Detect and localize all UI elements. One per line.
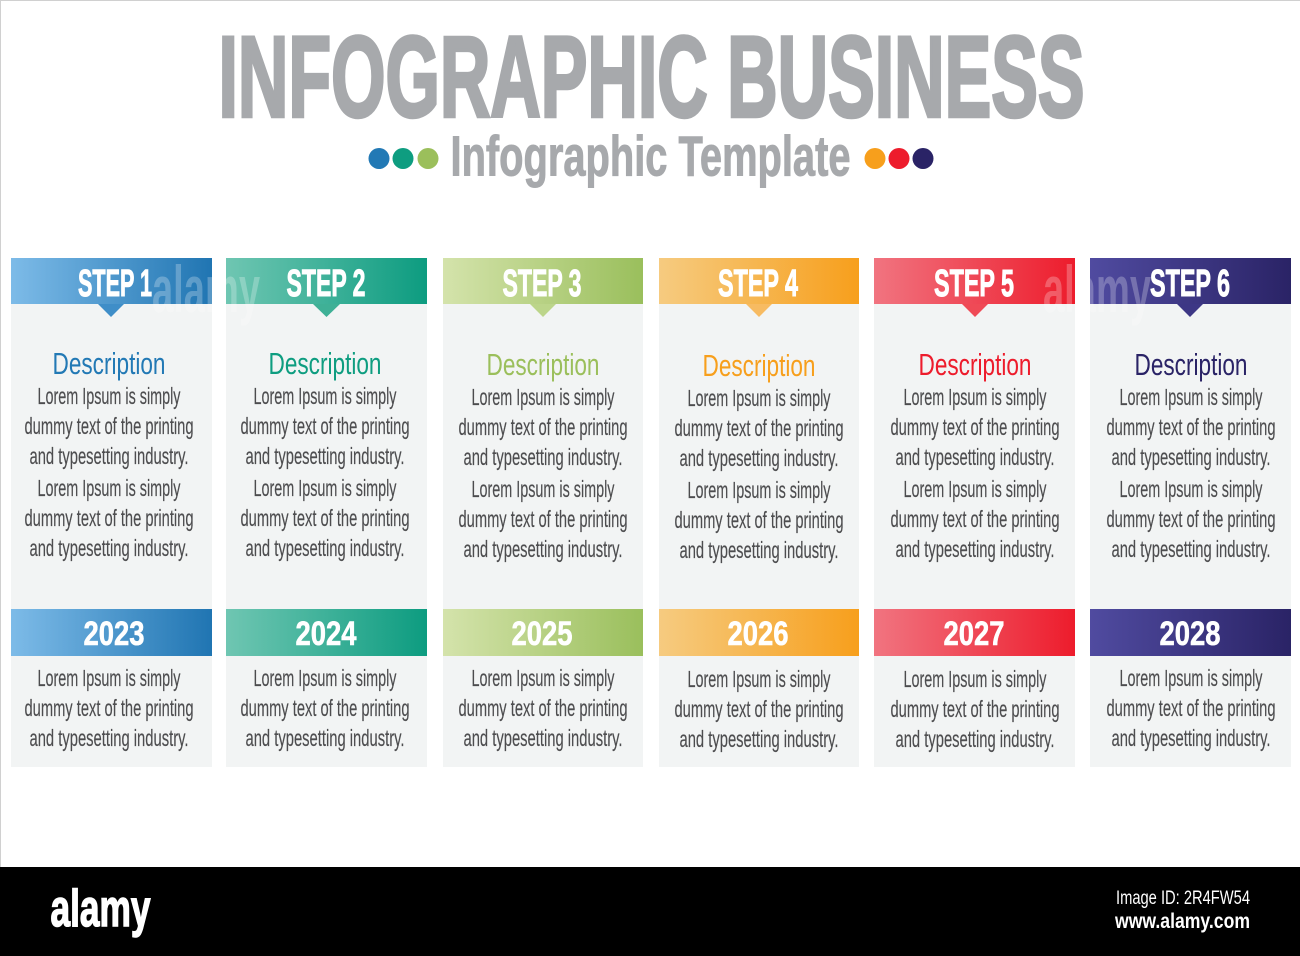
panel: step 2	[226, 258, 427, 767]
step 5 body text: dummy text of the printing	[890, 414, 1060, 440]
step 5 body text: and typesetting industry.	[896, 536, 1054, 562]
step 2 body text: Lorem Ipsum is simply	[254, 475, 397, 501]
step 1 body text: and typesetting industry.	[30, 443, 188, 469]
step 1 body text: Lorem Ipsum is simply	[38, 383, 181, 409]
step 5 body text: Lorem Ipsum is simply	[904, 384, 1047, 410]
panel: step 1	[11, 258, 212, 767]
year 2026	[659, 609, 859, 656]
step 4 body text: and typesetting industry.	[680, 445, 838, 471]
step 4 body text: Lorem Ipsum is simply	[688, 385, 831, 411]
step 3 body text: Lorem Ipsum is simply	[472, 384, 615, 410]
year 2025 text: dummy text of the printing	[458, 695, 628, 721]
year 2026 text: Lorem Ipsum is simply	[688, 666, 831, 692]
step 3 header: STEP 3	[502, 263, 582, 305]
year 2028	[1090, 609, 1291, 656]
year 2025: 2025	[512, 615, 572, 653]
year 2027 text: Lorem Ipsum is simply	[904, 666, 1047, 692]
year 2024 text: dummy text of the printing	[240, 695, 410, 721]
step 4 body text: and typesetting industry.	[680, 537, 838, 563]
icon: right coloured dots	[864, 148, 934, 169]
year 2025	[443, 609, 643, 656]
step 4 header: STEP 4	[718, 263, 798, 305]
year 2024 text: and typesetting industry.	[246, 725, 404, 751]
step 2 header	[226, 258, 427, 317]
year 2027	[874, 609, 1075, 656]
step 6 description: Description	[1134, 347, 1248, 382]
icon: left coloured dots	[368, 148, 438, 169]
year 2023	[11, 609, 212, 656]
step 1 description: Description	[52, 346, 166, 381]
website: www.alamy.com	[1114, 910, 1250, 933]
step 3 body text: and typesetting industry.	[464, 536, 622, 562]
step 1 body text: dummy text of the printing	[24, 505, 194, 531]
year 2025 text: and typesetting industry.	[464, 725, 622, 751]
step 4 body text	[674, 385, 844, 563]
panel: step 3	[443, 258, 643, 767]
step 2 description: Description	[268, 346, 382, 381]
step 4 body text: Lorem Ipsum is simply	[688, 477, 831, 503]
step 3 body text: and typesetting industry.	[464, 444, 622, 470]
year 2023 text: and typesetting industry.	[30, 725, 188, 751]
footer bar	[0, 867, 1300, 956]
panel: step 5	[874, 258, 1075, 767]
step 3 body text: dummy text of the printing	[458, 506, 628, 532]
year 2028 text	[1106, 665, 1276, 751]
watermarks: alamy	[152, 252, 260, 326]
step 4 header	[659, 258, 859, 317]
step 2 body text: dummy text of the printing	[240, 505, 410, 531]
step 3 body text	[458, 384, 628, 562]
step 2 body text: Lorem Ipsum is simply	[254, 383, 397, 409]
year 2027 text: and typesetting industry.	[896, 726, 1054, 752]
step 4 body text: dummy text of the printing	[674, 415, 844, 441]
step 1 body text: and typesetting industry.	[30, 535, 188, 561]
panel: step 4	[659, 258, 859, 767]
step 5 body text: and typesetting industry.	[896, 444, 1054, 470]
footer logo: alamy	[50, 880, 151, 938]
year 2026 text	[674, 666, 844, 752]
step 5 header: STEP 5	[934, 263, 1014, 305]
year 2024: 2024	[296, 615, 357, 653]
year 2027: 2027	[944, 615, 1004, 653]
year 2026: 2026	[728, 615, 788, 653]
year 2025 text	[458, 665, 628, 751]
step 5 body text	[890, 384, 1060, 562]
step 3 header	[443, 258, 643, 317]
step 5 body text: dummy text of the printing	[890, 506, 1060, 532]
year 2023 text	[24, 665, 194, 751]
step 2 body text	[240, 383, 410, 561]
year 2023 text: dummy text of the printing	[24, 695, 194, 721]
step 5 header	[874, 258, 1075, 317]
step 5 body text: Lorem Ipsum is simply	[904, 476, 1047, 502]
step 6 header: STEP 6	[1150, 263, 1230, 305]
step 2 body text: dummy text of the printing	[240, 413, 410, 439]
year 2027 text: dummy text of the printing	[890, 696, 1060, 722]
subtitle row	[368, 124, 934, 188]
step 1 body text	[24, 383, 194, 561]
step 6 header	[1090, 258, 1291, 317]
step 3 body text: Lorem Ipsum is simply	[472, 476, 615, 502]
step 4 description: Description	[702, 348, 816, 383]
step 1 header	[11, 258, 212, 317]
year 2026 text: and typesetting industry.	[680, 726, 838, 752]
step 3 body text: dummy text of the printing	[458, 414, 628, 440]
step 2 body text: and typesetting industry.	[246, 443, 404, 469]
year 2023 text: Lorem Ipsum is simply	[38, 665, 181, 691]
year 2023: 2023	[84, 615, 144, 653]
year 2024 text	[240, 665, 410, 751]
step 3 description: Description	[486, 347, 600, 382]
year 2026 text: dummy text of the printing	[674, 696, 844, 722]
year 2024 text: Lorem Ipsum is simply	[254, 665, 397, 691]
step 6 body text	[1106, 384, 1276, 562]
step 1 body text: Lorem Ipsum is simply	[38, 475, 181, 501]
step 2 body text: and typesetting industry.	[246, 535, 404, 561]
step 5 description: Description	[918, 347, 1032, 382]
step 1 body text: dummy text of the printing	[24, 413, 194, 439]
year 2028: 2028	[1160, 615, 1220, 653]
year 2025 text: Lorem Ipsum is simply	[472, 665, 615, 691]
year 2027 text	[890, 666, 1060, 752]
watermarks	[152, 252, 1151, 326]
image id: Image ID: 2R4FW54	[1116, 888, 1250, 909]
watermarks: alamy	[1043, 252, 1151, 326]
step 4 body text: dummy text of the printing	[674, 507, 844, 533]
subtitle: Infographic Template	[450, 124, 850, 188]
panel: step 6	[1090, 258, 1291, 767]
year 2024	[226, 609, 427, 656]
step 2 header: STEP 2	[286, 263, 366, 305]
step 1 header: STEP 1	[78, 263, 152, 305]
